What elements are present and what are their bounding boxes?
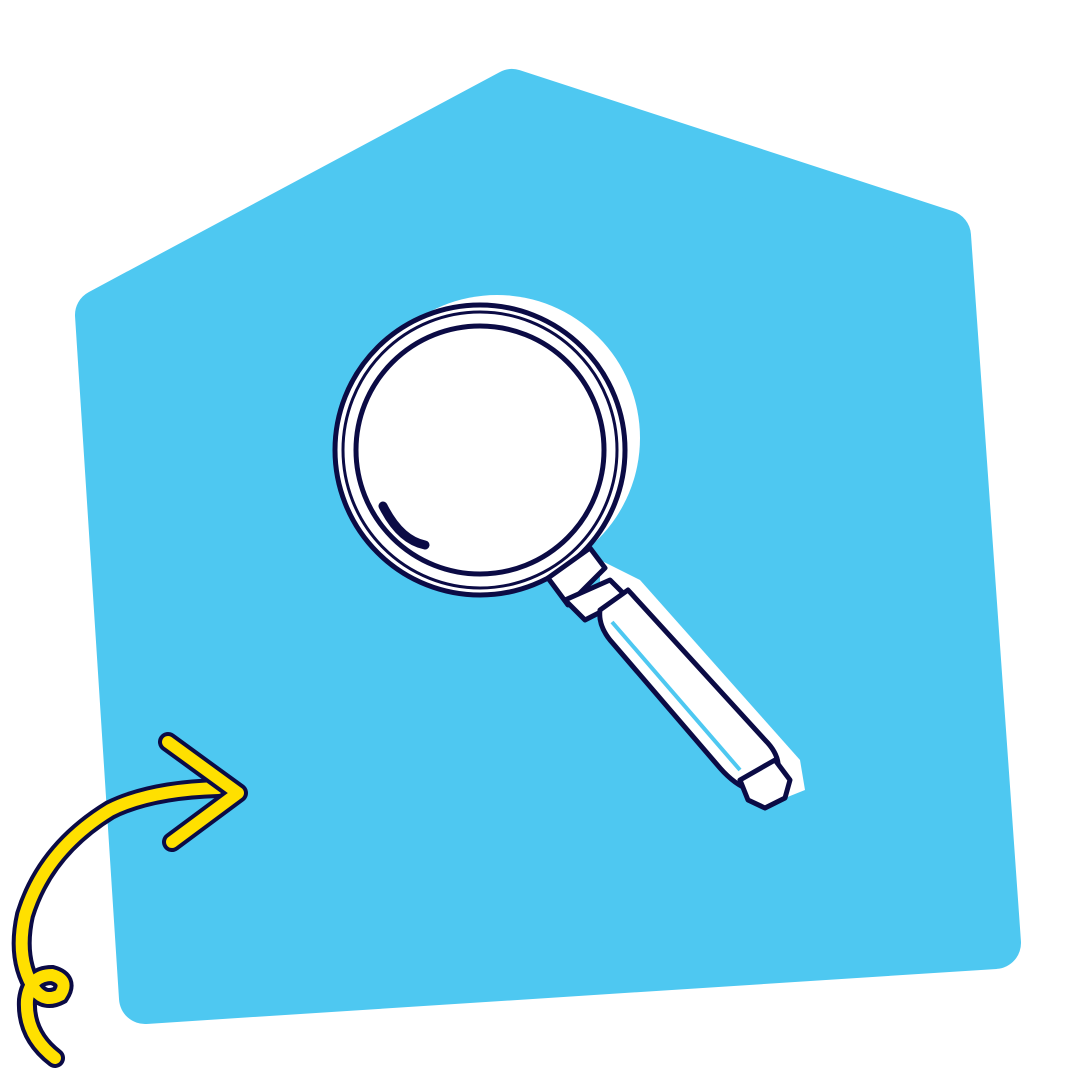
icon: magnifying glass [335, 295, 805, 808]
panel: blue pentagon background [101, 95, 995, 998]
arrow: yellow hand-drawn curved arrow [22, 742, 238, 1058]
